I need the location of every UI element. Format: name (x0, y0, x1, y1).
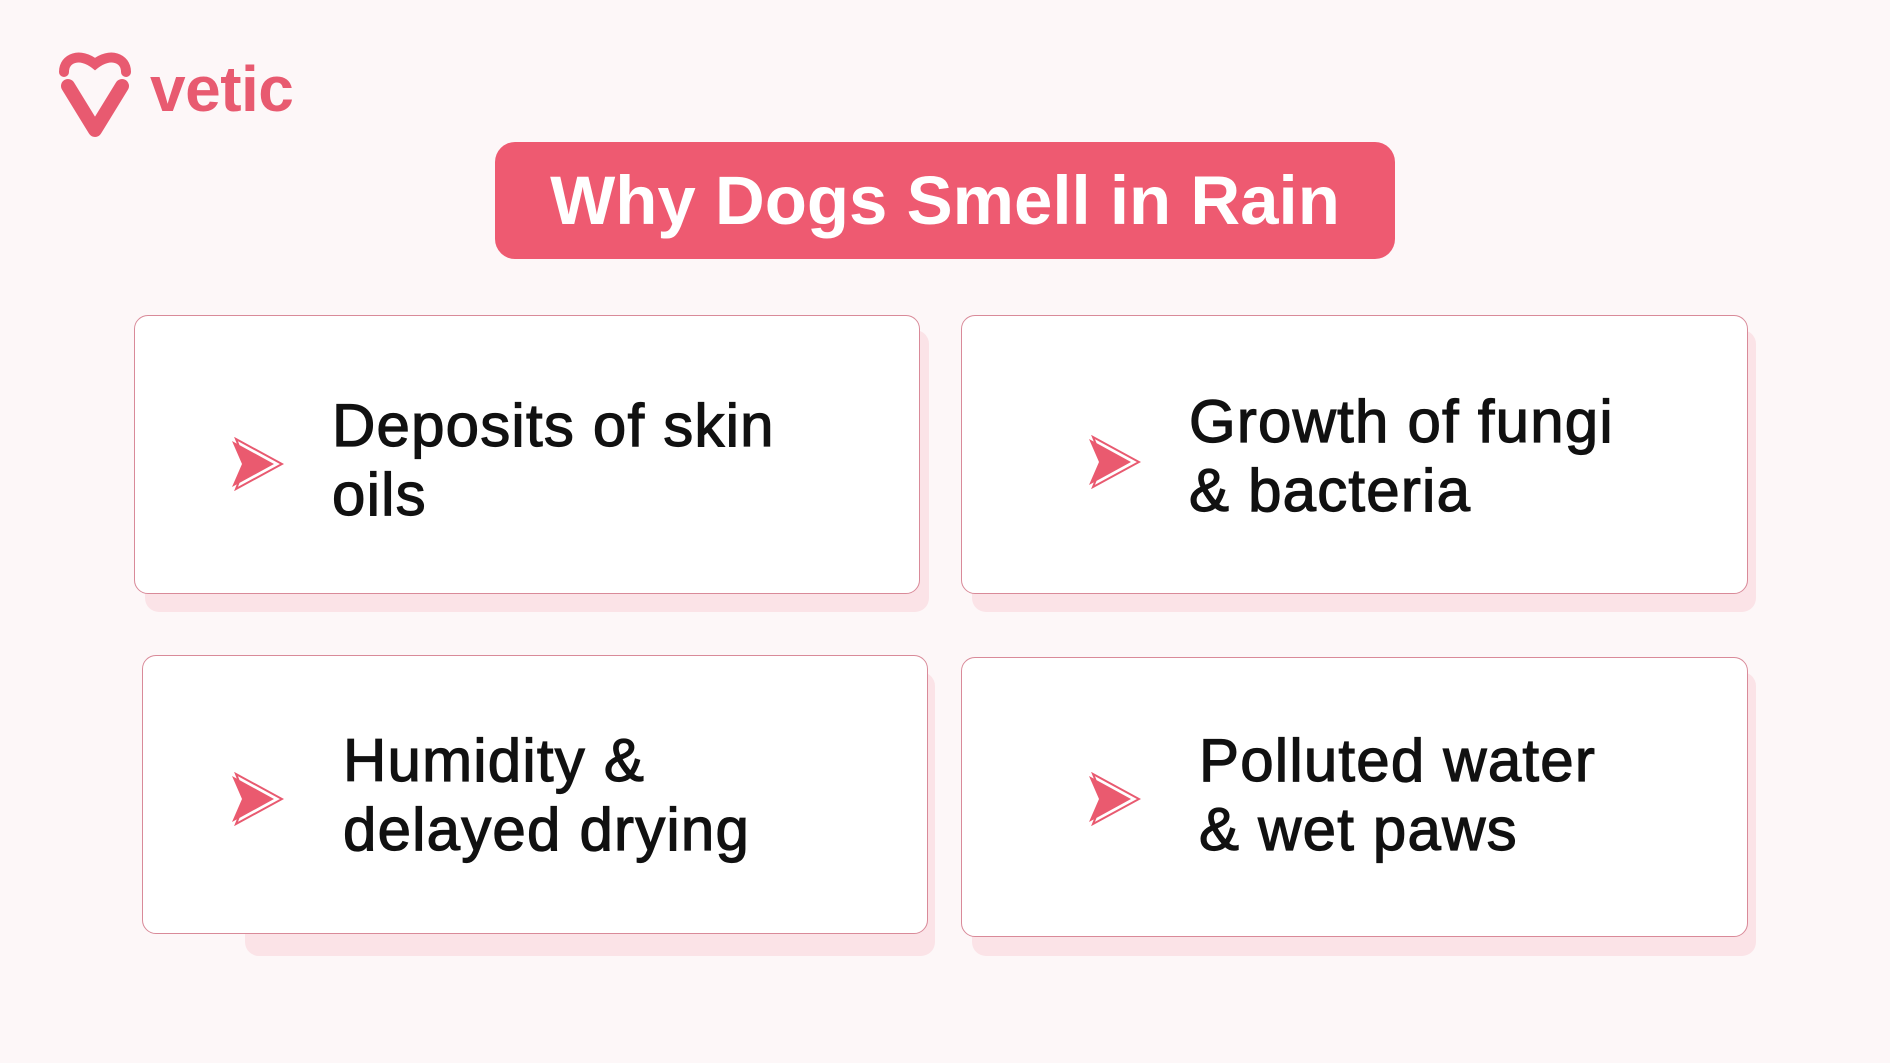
panel: polluted water (961, 657, 1748, 937)
brand name: vetic (150, 53, 293, 125)
icon: heart V (59, 52, 131, 137)
icon: arrow (232, 772, 284, 826)
text: oils (332, 461, 427, 528)
title banner: Why Dogs Smell in Rain (550, 162, 1340, 239)
text (1199, 727, 1596, 864)
panel: fungi (961, 315, 1748, 594)
panel: humidity (142, 655, 928, 934)
icon: arrow (232, 437, 284, 491)
icon: arrow (1089, 772, 1141, 826)
text: & bacteria (1189, 457, 1471, 524)
icon: arrow (1089, 435, 1141, 489)
text: delayed drying (343, 796, 750, 863)
shadows (145, 330, 929, 612)
panel: skin oils (134, 315, 920, 594)
logo: vetic (59, 52, 293, 137)
text (343, 727, 750, 864)
text (332, 392, 775, 528)
text: Humidity & (343, 727, 645, 794)
text: & wet paws (1199, 796, 1518, 863)
text (1189, 388, 1614, 524)
text: Growth of fungi (1189, 388, 1614, 455)
text: Deposits of skin (332, 392, 775, 459)
title banner (495, 142, 1395, 259)
text: Polluted water (1199, 727, 1596, 794)
